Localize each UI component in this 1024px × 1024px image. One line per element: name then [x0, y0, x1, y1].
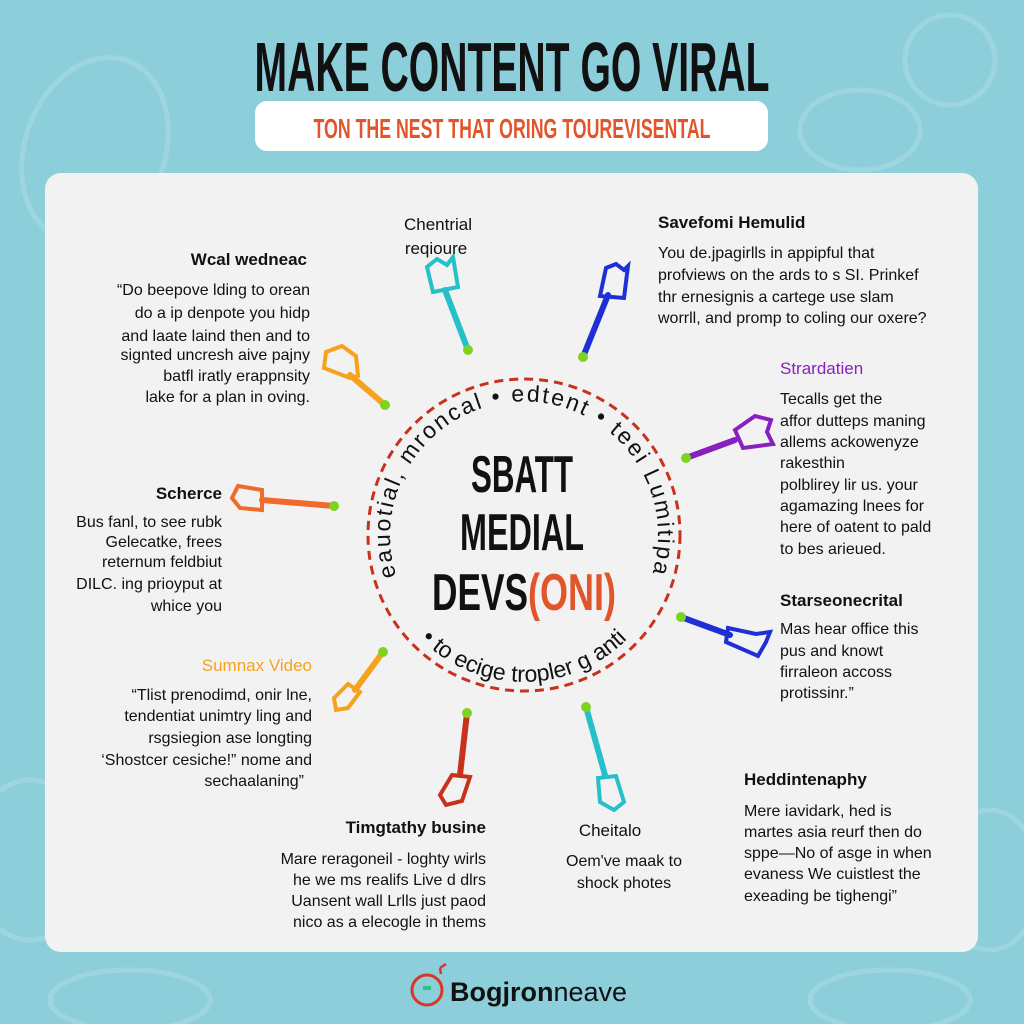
- block: Strardatien: polblirey lir us. your: [780, 477, 918, 494]
- block: Chentrial reqioure: reqioure: [405, 239, 467, 258]
- block: Savefomi Hemulid: profviews on the ards to s SI. Prinkef: [658, 267, 919, 284]
- block: Cheitalo: Cheitalo: [579, 821, 641, 840]
- block: Strardatien: Tecalls get the: [780, 391, 882, 408]
- block: Strardatien: rakesthin: [780, 455, 845, 472]
- footer logo: [412, 964, 627, 1007]
- block: Wcal wedneac: “Do beepove lding to orean: [117, 282, 310, 299]
- block: Starseonecrital: protissinr.”: [780, 685, 854, 702]
- block: Wcal wedneac: do a ip denpote you hidp: [135, 305, 310, 322]
- block: Sumnax Video: [101, 656, 312, 790]
- block: Strardatien: Strardatien: [780, 359, 863, 378]
- footer logo: Bogjronneave: [450, 977, 627, 1007]
- block: Heddintenaphy: [744, 770, 932, 905]
- block: Starseonecrital: Mas hear office this: [780, 621, 918, 638]
- block: Savefomi Hemulid: thr ernesignis a cartege use slam: [658, 289, 894, 306]
- block: Starseonecrital: Starseonecrital: [780, 591, 903, 610]
- text blocks: [76, 213, 932, 931]
- block: Starseonecrital: pus and knowt: [780, 643, 884, 660]
- center heading: DEVS: [432, 564, 528, 622]
- block: Starseonecrital: firraleon accoss: [780, 664, 892, 681]
- block: Heddintenaphy: Mere iavidark, hed is: [744, 803, 892, 820]
- block: Wcal wedneac: signted uncresh aive pajny: [121, 347, 310, 364]
- block: Sumnax Video: ‘Shostcer cesiche!” nome and: [101, 752, 312, 769]
- block: Cheitalo: shock photes: [577, 875, 671, 892]
- subtitle banner: [255, 101, 768, 151]
- block: Savefomi Hemulid: worrll, and promp to coling our oxere?: [657, 310, 927, 327]
- central dashed circle: [366, 378, 682, 692]
- block: Savefomi Hemulid: [657, 213, 927, 327]
- central dashed circle: eauotial, mroncal • edtent • teei Lumitipa: [376, 385, 675, 578]
- block: Timgtathy busine: Timgtathy busine: [346, 818, 486, 837]
- block: Starseonecrital: [780, 591, 918, 702]
- block: Scherce: Scherce: [156, 484, 222, 503]
- block: Strardatien: here of oatent to pald: [780, 519, 931, 536]
- block: Scherce: reternum feldbiut: [102, 554, 223, 571]
- block: Savefomi Hemulid: You de.jpagirlls in appipful that: [658, 245, 875, 262]
- block: Heddintenaphy: evaness We cuistlest the: [744, 866, 921, 883]
- block: Strardatien: allems ackowenyze: [780, 434, 919, 451]
- block: Strardatien: agamazing lnees for: [780, 498, 925, 515]
- block: Timgtathy busine: Uansent wall Lrlls just paod: [291, 893, 486, 910]
- block: Timgtathy busine: [281, 818, 486, 931]
- block: Strardatien: to bes arieued.: [780, 541, 886, 558]
- center heading: MEDIAL: [460, 504, 584, 562]
- block: Scherce: Bus fanl, to see rubk: [76, 514, 223, 531]
- block: Sumnax Video: sechaalaning”: [204, 773, 304, 790]
- block: Strardatien: [780, 359, 931, 558]
- block: Scherce: whice you: [150, 598, 222, 615]
- block: Chentrial reqioure: [404, 215, 472, 258]
- central dashed circle: • to ecige tropler g anti: [426, 628, 626, 686]
- block: Heddintenaphy: exeading be tighengi”: [744, 888, 897, 905]
- block: Wcal wedneac: batfl iratly erappnsity: [163, 368, 310, 385]
- block: Cheitalo: [566, 821, 682, 892]
- block: Wcal wedneac: Wcal wedneac: [191, 250, 307, 269]
- block: Chentrial reqioure: Chentrial: [404, 215, 472, 234]
- block: Timgtathy busine: Mare reragoneil - loghty wirls: [281, 851, 486, 868]
- block: Wcal wedneac: and laate laind then and to: [121, 328, 310, 345]
- center heading: [432, 446, 616, 622]
- block: Scherce: DILC. ing prioyput at: [76, 576, 223, 593]
- block: Wcal wedneac: lake for a plan in oving.: [145, 389, 310, 406]
- block: Scherce: Gelecatke, frees: [106, 534, 222, 551]
- block: Scherce: [76, 484, 223, 615]
- main panel: [45, 173, 978, 952]
- block: Sumnax Video: tendentiat unimtry ling and: [124, 708, 312, 725]
- center heading: SBATT: [471, 446, 573, 504]
- center heading: (ONI): [528, 564, 616, 622]
- block: Heddintenaphy: sppe—No of asge in when: [744, 845, 932, 862]
- block: Wcal wedneac: [117, 250, 310, 406]
- block: Timgtathy busine: he we ms realifs Live d dlrs: [293, 872, 486, 889]
- block: Timgtathy busine: nico as a elecogle in thems: [293, 914, 486, 931]
- block: Strardatien: affor dutteps maning: [780, 413, 926, 430]
- block: Heddintenaphy: Heddintenaphy: [744, 770, 867, 789]
- block: Sumnax Video: “Tlist prenodimd, onir lne,: [131, 687, 312, 704]
- block: Sumnax Video: Sumnax Video: [202, 656, 312, 675]
- subtitle banner: TON THE NEST THAT ORING TOUREVISENTAL: [314, 113, 710, 144]
- block: Savefomi Hemulid: Savefomi Hemulid: [658, 213, 805, 232]
- spokes with hand icons: [232, 257, 773, 810]
- block: Sumnax Video: rsgsiegion ase longting: [148, 730, 312, 747]
- block: Cheitalo: Oem've maak to: [566, 853, 682, 870]
- block: Heddintenaphy: martes asia reurf then do: [744, 824, 922, 841]
